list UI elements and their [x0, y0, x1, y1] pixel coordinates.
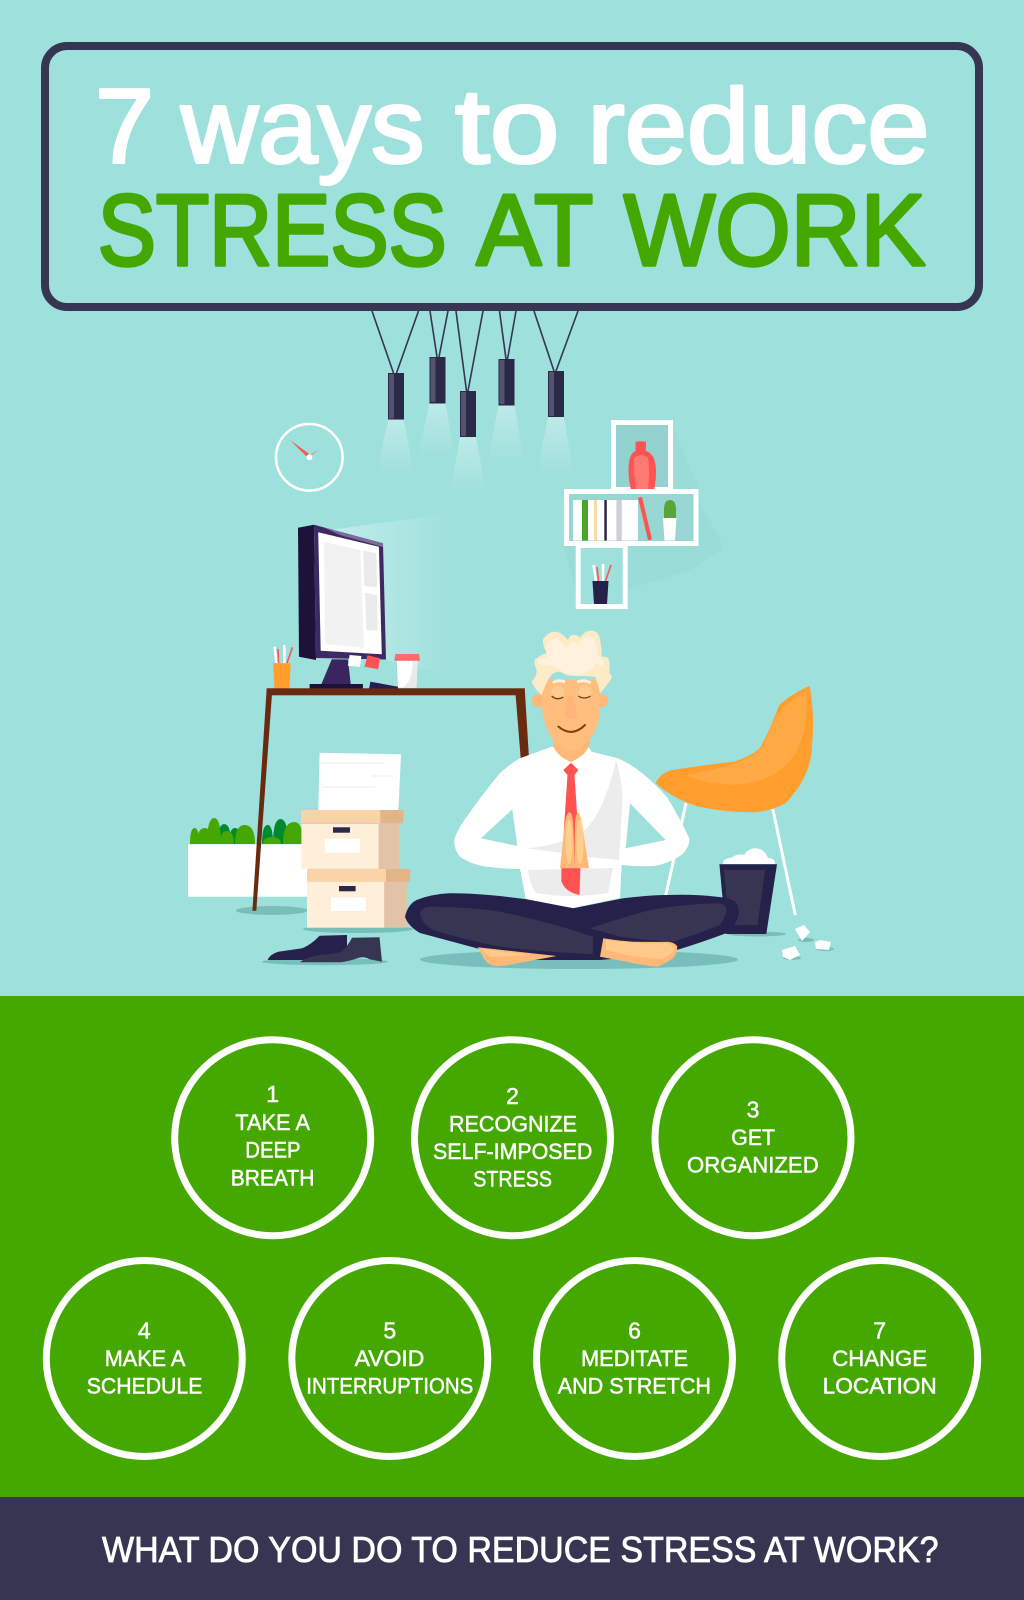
- hanging lamps: [372, 311, 578, 496]
- coffee cup: [394, 654, 420, 688]
- books: [573, 500, 638, 540]
- tip 7: 7: [873, 1317, 886, 1343]
- tip 7: LOCATION: [823, 1374, 937, 1399]
- eyebrows: [553, 681, 591, 683]
- storage box lower: [303, 869, 413, 933]
- feet: [600, 938, 677, 967]
- plant box: [188, 818, 309, 915]
- tip 4: SCHEDULE: [87, 1374, 202, 1399]
- tip 5: AVOID: [355, 1346, 424, 1371]
- title: ways: [180, 68, 424, 186]
- title: AT: [476, 175, 593, 287]
- title: WORK: [624, 175, 925, 287]
- tip 4: MAKE A: [105, 1346, 185, 1371]
- title: [95, 68, 930, 287]
- tip 1: [175, 1040, 371, 1236]
- tip 3: 3: [747, 1096, 759, 1122]
- title: to: [455, 68, 560, 186]
- tip 3: ORGANIZED: [687, 1153, 819, 1178]
- vase: [628, 442, 656, 490]
- footer bar: [0, 1497, 1024, 1600]
- shirt: [454, 745, 689, 908]
- trousers: [405, 893, 739, 960]
- tip 5: 5: [383, 1317, 396, 1343]
- office chair: [656, 686, 813, 915]
- nose: [564, 695, 577, 719]
- tip 2: STRESS: [473, 1167, 552, 1192]
- tip 5: [292, 1260, 488, 1456]
- storage box upper: [301, 810, 403, 869]
- crumpled paper: [782, 925, 834, 960]
- illustration: office scene: [188, 311, 834, 969]
- tip 1: TAKE A: [235, 1110, 310, 1135]
- arm gaps: [481, 809, 517, 846]
- tip 1: DEEP: [245, 1138, 301, 1163]
- waste bin: [719, 848, 786, 936]
- tip 6: [536, 1260, 732, 1456]
- tip 6: 6: [628, 1317, 641, 1343]
- shirt shading: [527, 760, 622, 860]
- tie: [561, 763, 580, 895]
- praying hands: [560, 812, 589, 868]
- panel: seven tips on green: [0, 996, 1024, 1497]
- title frame: [45, 46, 979, 307]
- background: teal wall: [0, 0, 1024, 996]
- face: [542, 680, 600, 751]
- smile: [558, 725, 585, 732]
- cactus: [664, 500, 676, 518]
- ears: [532, 694, 545, 707]
- computer monitor: [298, 513, 456, 689]
- tip 2: 2: [506, 1083, 519, 1109]
- tip 6: AND STRETCH: [558, 1374, 711, 1399]
- tip 4: [46, 1260, 242, 1456]
- tip 3: GET: [731, 1125, 775, 1150]
- desk: [252, 688, 529, 911]
- tip 1: BREATH: [231, 1165, 314, 1190]
- title: STRESS: [98, 175, 447, 287]
- wall clock: [276, 424, 343, 491]
- hair: [532, 631, 612, 695]
- tip 5: INTERRUPTIONS: [306, 1374, 473, 1399]
- footer question: WHAT DO YOU DO TO REDUCE STRESS AT WORK?: [102, 1529, 938, 1570]
- eyes closed: [551, 686, 564, 700]
- tip 2: SELF-IMPOSED: [433, 1139, 592, 1164]
- tip 7: [782, 1260, 978, 1456]
- wall shelves: [563, 422, 724, 606]
- tip 2: [414, 1040, 610, 1236]
- tip 2: RECOGNIZE: [449, 1111, 577, 1136]
- tip 1: 1: [266, 1081, 279, 1107]
- paper stack: [318, 753, 401, 810]
- tip 3: [655, 1040, 851, 1236]
- shoes: [262, 935, 388, 965]
- title: 7: [95, 68, 154, 186]
- neck: [553, 738, 589, 762]
- title: reduce: [588, 68, 930, 186]
- tip 6: MEDITATE: [581, 1346, 688, 1371]
- floor shadow: [420, 950, 738, 969]
- desk pencil holder: [273, 645, 292, 688]
- pencil cup on shelf: [592, 564, 611, 604]
- tip 7: CHANGE: [832, 1346, 927, 1371]
- meditating man: [405, 631, 739, 969]
- tip 4: 4: [138, 1317, 151, 1343]
